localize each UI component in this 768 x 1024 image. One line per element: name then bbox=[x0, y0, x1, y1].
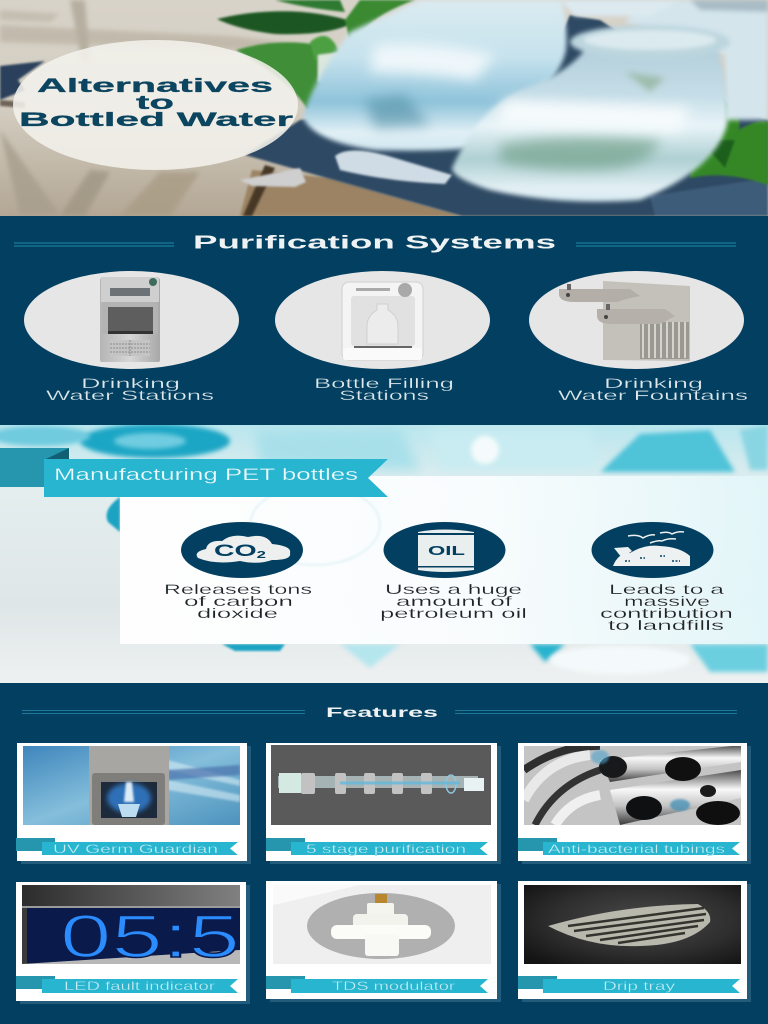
label: drinking water fountains bbox=[558, 375, 748, 403]
label: drinking water stations: Drinking bbox=[81, 375, 180, 391]
item: carbon dioxide bbox=[164, 522, 312, 621]
image: LED display bbox=[22, 885, 240, 970]
image: drip tray bbox=[524, 885, 741, 964]
item: bottle filling stations bbox=[275, 271, 490, 403]
text: contribution to landfills: Leads to a bbox=[609, 581, 724, 597]
card: LED fault indicator bbox=[16, 882, 250, 1004]
icon: oil barrel bbox=[384, 522, 506, 578]
image: steel tubes bbox=[524, 745, 741, 825]
card: drip tray bbox=[518, 881, 751, 1002]
title badge: Alternatives bbox=[37, 75, 273, 97]
icon: landfill with birds bbox=[592, 522, 714, 578]
label ribbon: TDS modulator: TDS modulator bbox=[332, 979, 455, 993]
hero photo: jars of water on slate bbox=[0, 0, 768, 216]
label ribbon: anti-bacterial tubings bbox=[518, 838, 740, 856]
label ribbon: UV germ guardian bbox=[16, 838, 238, 856]
item: drinking water stations bbox=[24, 271, 239, 403]
ribbon: manufacturing PET bottles: Manufacturing PET bottles bbox=[54, 466, 358, 484]
card: 5 stage purification bbox=[266, 743, 501, 864]
label: drinking water fountains: Water Fountains bbox=[558, 387, 748, 403]
label: bottle filling stations: Bottle Filling bbox=[314, 375, 454, 391]
label ribbon: LED fault indicator: LED fault indicator bbox=[64, 979, 215, 993]
icon: wall fountains bbox=[559, 281, 690, 361]
leaves bbox=[217, 0, 768, 185]
panel: manufacturing PET bottles bbox=[0, 424, 768, 683]
label: bottle filling stations bbox=[314, 375, 454, 403]
title badge bbox=[13, 40, 298, 170]
text: releases carbon dioxide: dioxide bbox=[197, 605, 278, 621]
ribbon: manufacturing PET bottles bbox=[0, 448, 388, 497]
ice chunks bbox=[335, 150, 452, 184]
card: TDS modulator bbox=[266, 881, 501, 1002]
label ribbon: drip tray: Drip tray bbox=[603, 979, 675, 993]
label: drinking water fountains: Drinking bbox=[604, 375, 703, 391]
text: releases carbon dioxide bbox=[166, 584, 312, 618]
jar one bbox=[303, 0, 566, 151]
text: releases carbon dioxide: of carbon bbox=[184, 593, 293, 609]
panel: features bbox=[16, 708, 751, 1004]
label: drinking water stations: Water Stations bbox=[46, 387, 214, 403]
item: petroleum oil bbox=[380, 522, 527, 621]
item: drinking water fountains bbox=[529, 271, 748, 403]
label: bottle filling stations: Stations bbox=[339, 387, 429, 403]
jar two bbox=[452, 25, 730, 202]
text: uses petroleum oil: Uses a huge bbox=[385, 581, 522, 597]
label ribbon: TDS modulator bbox=[266, 976, 488, 993]
text: contribution to landfills: contribution bbox=[600, 605, 733, 621]
card: anti-bacterial tubings bbox=[518, 743, 751, 864]
label ribbon: UV germ guardian: UV Germ Guardian bbox=[53, 842, 218, 856]
icon: oil barrel: OIL bbox=[428, 543, 465, 558]
text: contribution to landfills bbox=[601, 584, 732, 630]
text: releases carbon dioxide: Releases tons bbox=[164, 581, 312, 597]
slate board bbox=[0, 15, 768, 216]
text: contribution to landfills: massive bbox=[624, 593, 710, 609]
label ribbon: LED fault indicator bbox=[16, 976, 238, 993]
title badge: Bottled Water bbox=[19, 109, 294, 131]
background: blurred bottles bbox=[0, 424, 768, 674]
label ribbon: drip tray bbox=[518, 976, 740, 993]
image: filter stages bbox=[271, 745, 491, 825]
image: UV dispenser bbox=[23, 746, 240, 825]
heading: features: Features bbox=[326, 705, 438, 720]
image: LED display: 05:5 bbox=[60, 903, 240, 970]
icon: CO2 cloud: CO bbox=[214, 541, 240, 560]
heading: purification systems: Purification Systems bbox=[193, 232, 556, 252]
text: uses petroleum oil bbox=[380, 581, 527, 621]
panel: purification systems bbox=[0, 216, 768, 425]
icon: CO2 cloud: 2 bbox=[257, 550, 267, 561]
title badge: to bbox=[136, 92, 174, 114]
icon: bottle filler bbox=[342, 282, 423, 360]
image: TDS valve bbox=[273, 885, 491, 964]
icon: CO2 cloud bbox=[181, 522, 303, 578]
label ribbon: 5 stage purification: 5 stage purification bbox=[306, 842, 466, 856]
label ribbon: anti-bacterial tubings: Anti-bacterial tubings bbox=[548, 842, 725, 856]
back jar bbox=[560, 0, 768, 120]
card: UV germ guardian bbox=[16, 743, 251, 864]
text: contribution to landfills: to landfills bbox=[608, 617, 724, 633]
icon: water station machine bbox=[100, 277, 160, 362]
item: landfills bbox=[592, 522, 733, 633]
text: uses petroleum oil: petroleum oil bbox=[380, 605, 527, 621]
label ribbon: 5 stage purification bbox=[266, 838, 488, 856]
text: uses petroleum oil: amount of bbox=[396, 593, 512, 609]
label: drinking water stations bbox=[46, 375, 214, 403]
